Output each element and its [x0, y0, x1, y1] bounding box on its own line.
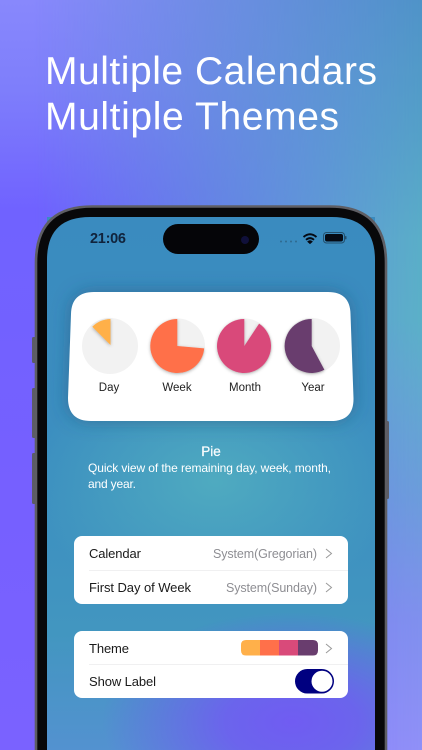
row: show label: Show Label [89, 674, 156, 689]
row: first day of week: System(Sunday) [226, 581, 317, 595]
pie: day: Day [99, 382, 119, 394]
row: calendar: System(Gregorian) [213, 547, 317, 561]
phone frame [32, 206, 389, 750]
panel: pie widget [68, 292, 354, 421]
description text [88, 444, 331, 491]
description text: and year. [88, 477, 136, 491]
row: first day of week [89, 580, 332, 595]
toggle [295, 669, 334, 694]
description text: Pie [201, 444, 221, 459]
pie: year: Year [301, 382, 325, 394]
pie: month [217, 318, 272, 394]
title [45, 50, 377, 138]
signal dots [280, 240, 297, 242]
phone screen gradient [47, 217, 375, 750]
row: first day of week: First Day of Week [89, 580, 192, 595]
description text: Quick view of the remaining day, week, month, [88, 461, 331, 475]
title: Multiple Calendars [45, 50, 377, 93]
title: Multiple Themes [45, 96, 339, 138]
pie: month: Month [229, 382, 261, 394]
icon: battery [324, 232, 346, 243]
icon: wifi [304, 234, 316, 244]
row: show label [89, 669, 334, 694]
row: calendar [89, 546, 332, 561]
dynamic island [163, 224, 259, 254]
panel: theme settings [74, 631, 348, 698]
pie: day [82, 318, 138, 394]
status bar [90, 224, 346, 254]
row: theme: Theme [89, 641, 129, 656]
theme swatch [241, 640, 318, 656]
pie: year [284, 318, 340, 394]
row: calendar: Calendar [89, 546, 142, 561]
panel: calendar settings [74, 536, 348, 604]
pie: week [150, 318, 205, 394]
clock: 21:06 [90, 231, 126, 247]
row: theme [89, 640, 332, 656]
pie: week: Week [162, 382, 192, 394]
